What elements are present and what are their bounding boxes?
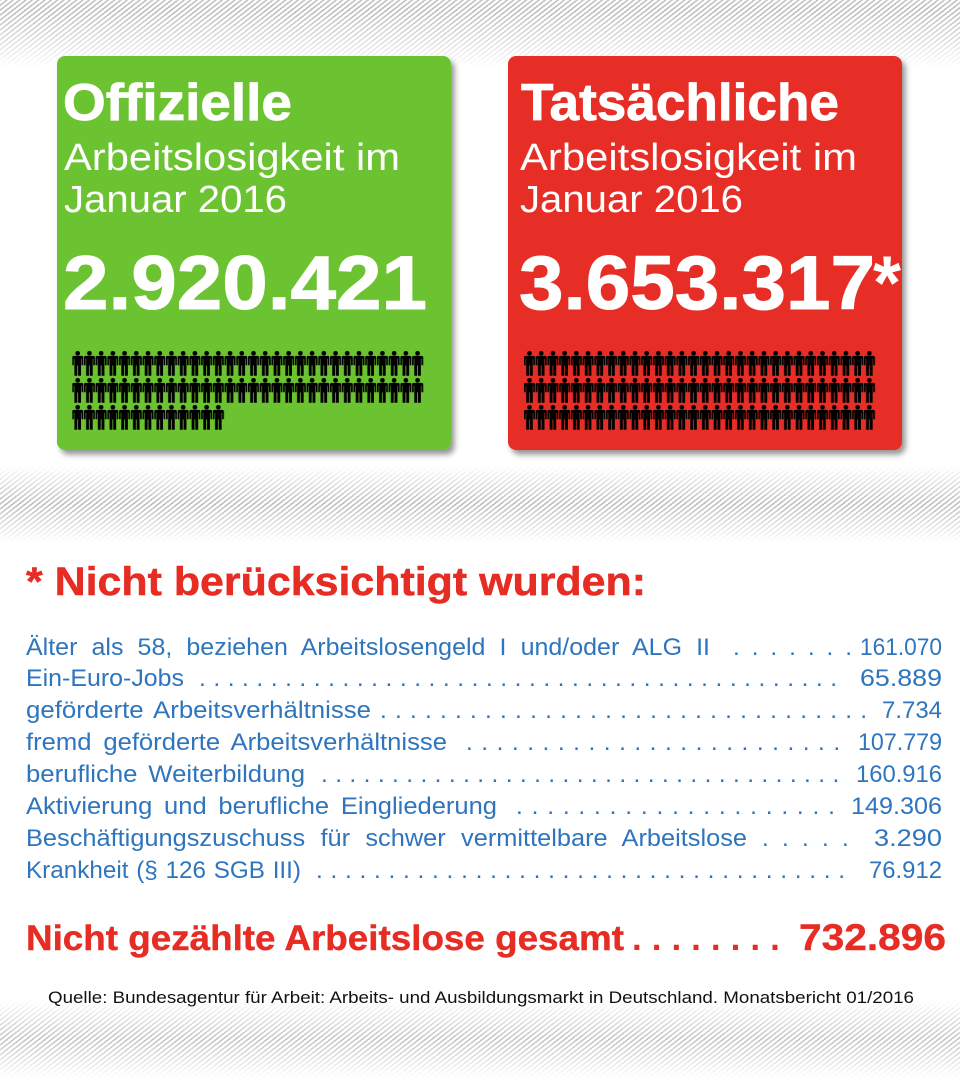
subtitle line 1: Arbeitslosigkeit im — [520, 137, 857, 179]
heading: Offizielle: Offizielle — [63, 74, 292, 132]
total row — [26, 917, 946, 958]
row: further training: berufliche Weiterbildung — [26, 761, 305, 788]
row: further training: 160.916 — [856, 761, 942, 788]
row: subsidised employment: 7.734 — [882, 697, 942, 724]
red card background — [508, 56, 902, 450]
total row: Nicht gezählte Arbeitslose gesamt — [26, 919, 624, 958]
heading: not counted: * Nicht berücksichtigt wurden: — [26, 560, 646, 604]
row: further training: ..................................... — [321, 761, 847, 788]
row: illness: 76.912 — [869, 857, 942, 884]
official number: 2.920.421 — [63, 241, 427, 326]
panel: official unemployment — [57, 56, 451, 450]
actual number: 3.653.317 — [519, 241, 875, 326]
row: further training — [26, 761, 942, 788]
row: subsidised employment: ................................. — [380, 697, 875, 724]
pictogram: people rows — [524, 351, 876, 431]
subtitle line 2: Januar 2016 — [64, 179, 287, 221]
row: employment subsidy: ..... — [762, 825, 862, 852]
row: activation and integration — [26, 793, 942, 820]
row: one-euro jobs: Ein-Euro-Jobs — [26, 665, 184, 692]
row: illness: ..................................... — [316, 857, 853, 884]
row: subsidised employment: geförderte Arbeitsverhältnisse — [26, 697, 371, 724]
row: illness: Krankheit (§ 126 SGB III) — [26, 857, 301, 884]
row: older than 58: Älter als 58, beziehen Arbeitslosengeld I und/oder ALG II — [26, 634, 710, 661]
green card background — [57, 56, 451, 450]
row: activation and integration: ..................... — [516, 793, 844, 820]
row: externally subsidised employment: fremd geförderte Arbeitsverhältnisse — [26, 729, 447, 756]
row: older than 58: 161.070 — [860, 634, 942, 661]
row: older than 58: ....... — [733, 634, 864, 661]
actual number: * — [873, 241, 901, 326]
row: employment subsidy: 3.290 — [874, 825, 942, 852]
row: externally subsidised employment: 107.779 — [858, 729, 942, 756]
source line: Quelle: Bundesagentur für Arbeit: Arbeits- und Ausbildungsmarkt in Deutschland. Monatsbericht 01/2016 — [48, 989, 914, 1007]
total row: ........ — [632, 919, 790, 958]
row: externally subsidised employment: ......................... — [466, 729, 849, 756]
table: not counted groups — [26, 634, 942, 884]
row: one-euro jobs: ............................................. — [199, 665, 845, 692]
panel: actual unemployment — [508, 56, 902, 450]
row: activation and integration: 149.306 — [851, 793, 942, 820]
subtitle line 2: Januar 2016 — [520, 179, 743, 221]
subtitle line 1: Arbeitslosigkeit im — [64, 137, 400, 179]
row: externally subsidised employment — [26, 729, 942, 756]
row: activation and integration: Aktivierung und berufliche Eingliederung — [26, 793, 497, 820]
row: employment subsidy: Beschäftigungszuschuss für schwer vermittelbare Arbeitslose — [26, 825, 747, 852]
total row: 732.896 — [799, 917, 946, 958]
heading: Tatsächliche: Tatsächliche — [521, 74, 839, 132]
row: illness — [26, 857, 942, 884]
pictogram: people rows — [72, 351, 424, 431]
row: subsidised employment — [26, 697, 942, 724]
row: one-euro jobs: 65.889 — [860, 665, 942, 692]
